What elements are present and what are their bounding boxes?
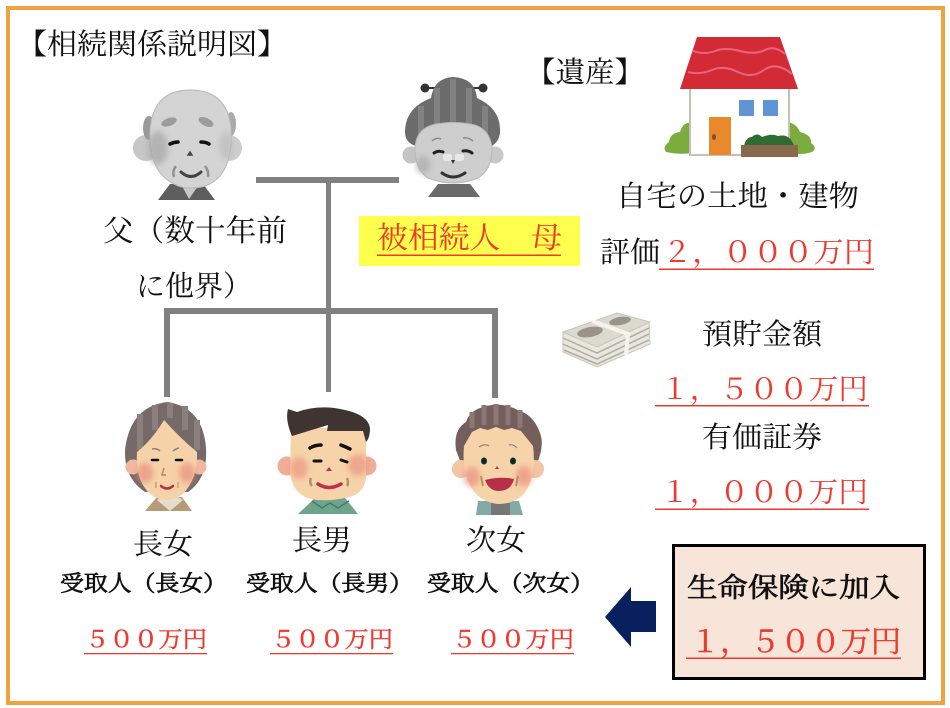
icon: house [665, 37, 815, 157]
text: securities amount: １，０００万円 [660, 477, 868, 509]
text: valuation 20 million yen: 評価 [600, 236, 660, 269]
label: eldest son: ５００万円 [271, 627, 393, 652]
text: deposit amount: １，５００万円 [660, 374, 868, 406]
arrow: navy left arrow [605, 587, 656, 647]
label: second daughter [427, 524, 594, 654]
label: deceased mother highlighted [359, 216, 580, 266]
icon: banknote bundle [563, 313, 650, 367]
text: valuation 20 million yen: ２，０００万円 [662, 237, 874, 269]
label: second daughter: 受取人（次女） [427, 571, 594, 596]
family tree connector lines [164, 177, 498, 398]
icon: second daughter face [452, 404, 544, 515]
label: father [103, 215, 287, 303]
icon: father face [133, 90, 242, 200]
label: eldest daughter: 受取人（長女） [60, 571, 227, 596]
text: securities: 有価証券 [702, 421, 822, 454]
text: home land and building: 自宅の土地・建物 [616, 180, 859, 213]
text: valuation 20 million yen [600, 236, 874, 270]
label: eldest son [246, 525, 413, 654]
label: eldest daughter [60, 528, 227, 654]
callout: life insurance: １，５００万円 [690, 626, 901, 659]
icon: eldest son face [278, 407, 376, 514]
icon: mother face [402, 77, 504, 197]
label: second daughter: ５００万円 [452, 627, 574, 652]
heading: estate: 【遺産】 [526, 56, 644, 89]
callout: life insurance: 生命保険に加入 [687, 573, 900, 603]
label: second daughter: 次女 [466, 524, 526, 557]
label: deceased mother highlighted: 被相続人 母 [377, 222, 562, 255]
label: eldest son: 長男 [292, 525, 352, 557]
label: eldest daughter: 長女 [133, 528, 193, 561]
callout: life insurance [674, 546, 924, 678]
label: eldest son: 受取人（長男） [246, 571, 413, 596]
label: eldest daughter: ５００万円 [85, 627, 207, 652]
title: 【相続関係説明図】 [17, 28, 287, 61]
label: father: 父（数十年前 [103, 215, 287, 248]
text: deposits: 預貯金額 [702, 318, 823, 351]
icon: eldest daughter face [125, 402, 206, 511]
label: father: に他界） [136, 270, 252, 303]
